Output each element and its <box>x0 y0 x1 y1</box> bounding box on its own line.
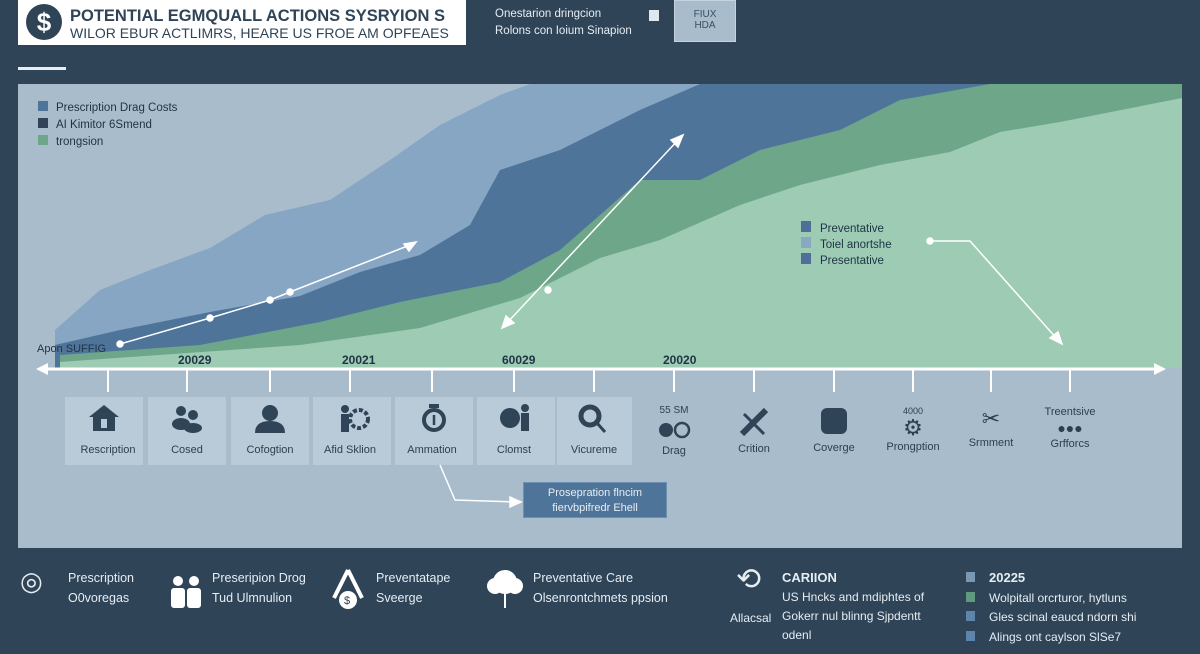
footer: items: US Hncks and mdiphtes of <box>782 590 924 604</box>
item: Grfforcs <box>1044 406 1095 450</box>
footer: items: ◎ <box>20 567 43 597</box>
footer legend: Wolpitall orcrturor, hytluns <box>989 590 1127 604</box>
timeline boxes with icons: Afid Sklion <box>324 444 376 456</box>
item: Grfforcs: ●●● <box>1057 420 1083 436</box>
footer: items: $ <box>344 595 350 607</box>
header note: Onestarion dringcion <box>495 8 601 20</box>
year labels: 20021 <box>342 353 376 367</box>
callout box: fiervbpifredr Ehell <box>552 502 638 514</box>
header badge: HDA <box>694 20 716 31</box>
footer: items: Olsenrontchmets ppsion <box>533 591 668 605</box>
item: Coverge: Coverge <box>813 442 855 454</box>
footer item 5 <box>730 562 924 642</box>
footer legend: Alings ont caylson SlSe7 <box>989 630 1121 644</box>
legend: chart top-left: trongsion <box>56 136 103 148</box>
item: Drag: 55 SM <box>660 405 688 416</box>
footer: items: Gokerr nul blinng Sjpdentt <box>782 609 921 623</box>
box: Vicureme <box>557 397 632 465</box>
box: Rescription <box>65 397 143 465</box>
box: Cosed <box>148 397 226 465</box>
year labels <box>37 343 697 367</box>
icon: small square <box>649 10 659 21</box>
item: Crition: Crition <box>738 443 770 455</box>
box: Ammation <box>395 397 473 465</box>
footer: items: Prescription <box>68 571 134 585</box>
legend: chart right: Presentative <box>820 255 884 267</box>
footer: items: Allacsal <box>730 611 771 625</box>
subtitle text: WILOR EBUR ACTLIMRS, HEARE US FROE AM OPFEAES <box>70 25 449 41</box>
arrow: trend left <box>117 242 416 347</box>
footer: items: odenl <box>782 628 811 642</box>
item: Drag <box>659 405 690 457</box>
item: Prongption: Prongption <box>886 441 940 453</box>
item: Grfforcs: Treentsive <box>1045 406 1095 418</box>
footer: items: Preventatape <box>376 571 450 585</box>
arrow: right callout <box>927 238 1062 344</box>
footer item 1 <box>20 567 134 605</box>
icon: dollar coin <box>26 4 62 40</box>
legend: chart top-left <box>38 101 177 148</box>
year labels: 20020 <box>663 353 697 367</box>
title banner <box>18 0 466 45</box>
timeline axis <box>36 363 1166 375</box>
item: Prongption: 4000 <box>903 406 923 416</box>
item: Grfforcs: Grfforcs <box>1051 438 1089 450</box>
footer: items: Tud Ulmnulion <box>212 591 292 605</box>
item: Prongption <box>886 406 940 453</box>
legend: chart top-left: Prescription Drag Costs <box>56 102 177 114</box>
item: Drag: Drag <box>662 445 686 457</box>
title text: POTENTIAL EGMQUALL ACTIONS SYSRYION S <box>70 7 445 25</box>
legend: chart right: Preventative <box>820 223 884 235</box>
timeline boxes with icons <box>65 397 1095 465</box>
box: Cofogtion <box>231 397 309 465</box>
footer legend: 20225 <box>989 570 1025 585</box>
timeline boxes with icons: Cosed <box>171 444 203 456</box>
footer item 3 <box>332 569 450 609</box>
footer legend: Gles scinal eaucd ndorn shi <box>989 610 1136 624</box>
timeline boxes with icons: Ammation <box>407 444 457 456</box>
header note: Rolons con Ioium Sinapion <box>495 25 632 37</box>
footer: items: Preventative Care <box>533 571 633 585</box>
item: Srmment: Srmment <box>969 437 1013 449</box>
year labels: 60029 <box>502 353 536 367</box>
item: Srmment: ✂ <box>982 407 1000 432</box>
timeline ticks <box>108 370 1070 392</box>
footer legend <box>966 570 1136 644</box>
main panel <box>18 84 1182 548</box>
legend: chart top-left: AI Kimitor 6Smend <box>56 119 152 131</box>
divider short line <box>18 67 66 70</box>
footer: items: Preseripion Drog <box>212 571 306 585</box>
item: Prongption: ⚙ <box>903 416 923 441</box>
timeline boxes with icons: Vicureme <box>571 444 617 456</box>
footer: items: Sveerge <box>376 591 423 605</box>
year labels: Apon SUFFIG <box>37 343 106 355</box>
footer item 2 <box>171 571 306 608</box>
item: Coverge <box>813 408 855 454</box>
footer: items: ⟲ <box>736 562 761 597</box>
header badge: FIUX <box>694 9 716 20</box>
callout box: Prosepration flncim <box>548 487 642 499</box>
legend: chart right: Toiel anortshe <box>820 239 892 251</box>
area chart <box>55 84 1182 368</box>
timeline boxes with icons: Cofogtion <box>246 444 294 456</box>
item: Srmment <box>969 407 1014 449</box>
footer: items: O0voregas <box>68 591 129 605</box>
header note <box>495 8 632 37</box>
box: Afid Sklion <box>313 397 391 465</box>
callout box <box>523 482 667 518</box>
legend: chart right <box>801 221 892 267</box>
item: Crition <box>738 408 770 455</box>
arrow: connector to callout <box>440 465 521 507</box>
footer: items: CARIION <box>782 570 837 585</box>
timeline boxes with icons: Clomst <box>497 444 531 456</box>
arrow: double diagonal <box>502 135 683 328</box>
header badge <box>674 0 736 42</box>
year labels: 20029 <box>178 353 212 367</box>
box: Clomst <box>477 397 555 465</box>
footer item 4 <box>487 570 668 608</box>
icon: dollar coin: $ <box>37 7 51 37</box>
footer: items <box>20 562 1136 644</box>
labels row: Rescription <box>80 444 136 456</box>
